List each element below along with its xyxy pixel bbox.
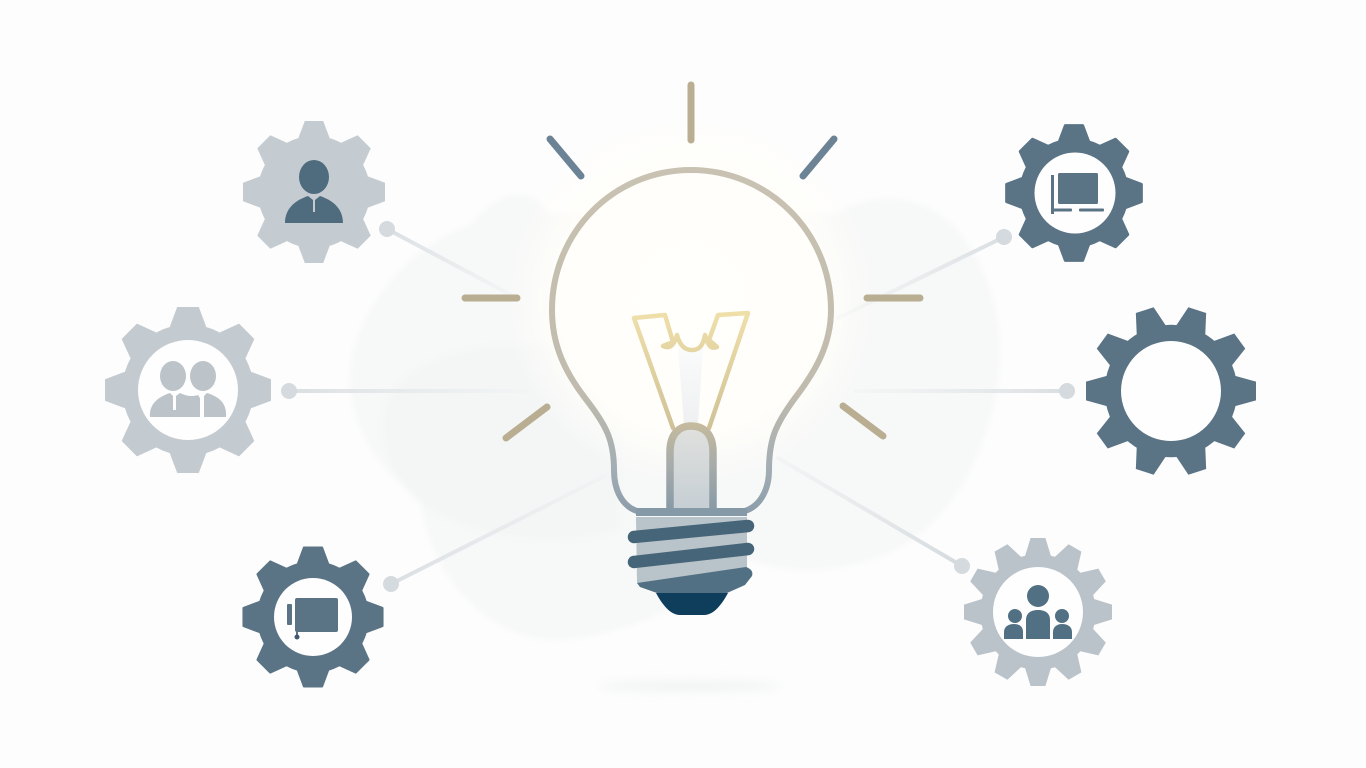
bulb glow [506,115,876,485]
ray: left [465,294,517,302]
light rays [465,85,920,438]
filament beam [678,348,703,425]
bulb glass outline [552,170,831,511]
thread one [634,526,748,537]
ray: upper left [550,139,581,176]
gear: bottom-left panel [244,548,382,686]
icon: group of people [1004,585,1072,639]
thread three [637,567,752,593]
connector: top-right [838,229,1012,318]
gear: top-right screen [1006,126,1142,260]
filament [634,313,748,428]
background blobs [350,195,1000,640]
icon: person [285,160,343,223]
bulb shadow [598,682,782,690]
collar [636,508,747,516]
thread two [634,549,748,562]
ray: top [688,85,694,140]
gear: top-left person [243,121,385,263]
connector: right [855,383,1075,399]
ray: lower right [843,406,883,436]
connector: left [281,383,525,399]
icon: two people [150,361,226,417]
icon: screen [1051,173,1104,214]
gear: left two people [105,307,271,473]
connector: top-left [379,221,515,297]
light bulb [552,170,831,615]
connector: bottom-left [383,476,605,592]
ray: upper right [803,139,834,176]
stem [670,426,713,512]
ray: right [867,294,920,302]
bottom cap [656,593,728,615]
gear: bottom-right group [964,538,1112,686]
ray: lower left [506,407,547,438]
connector: bottom-right [778,458,970,574]
icon: panel [287,598,338,640]
screw base [636,517,747,583]
gear: right empty [1086,305,1256,477]
